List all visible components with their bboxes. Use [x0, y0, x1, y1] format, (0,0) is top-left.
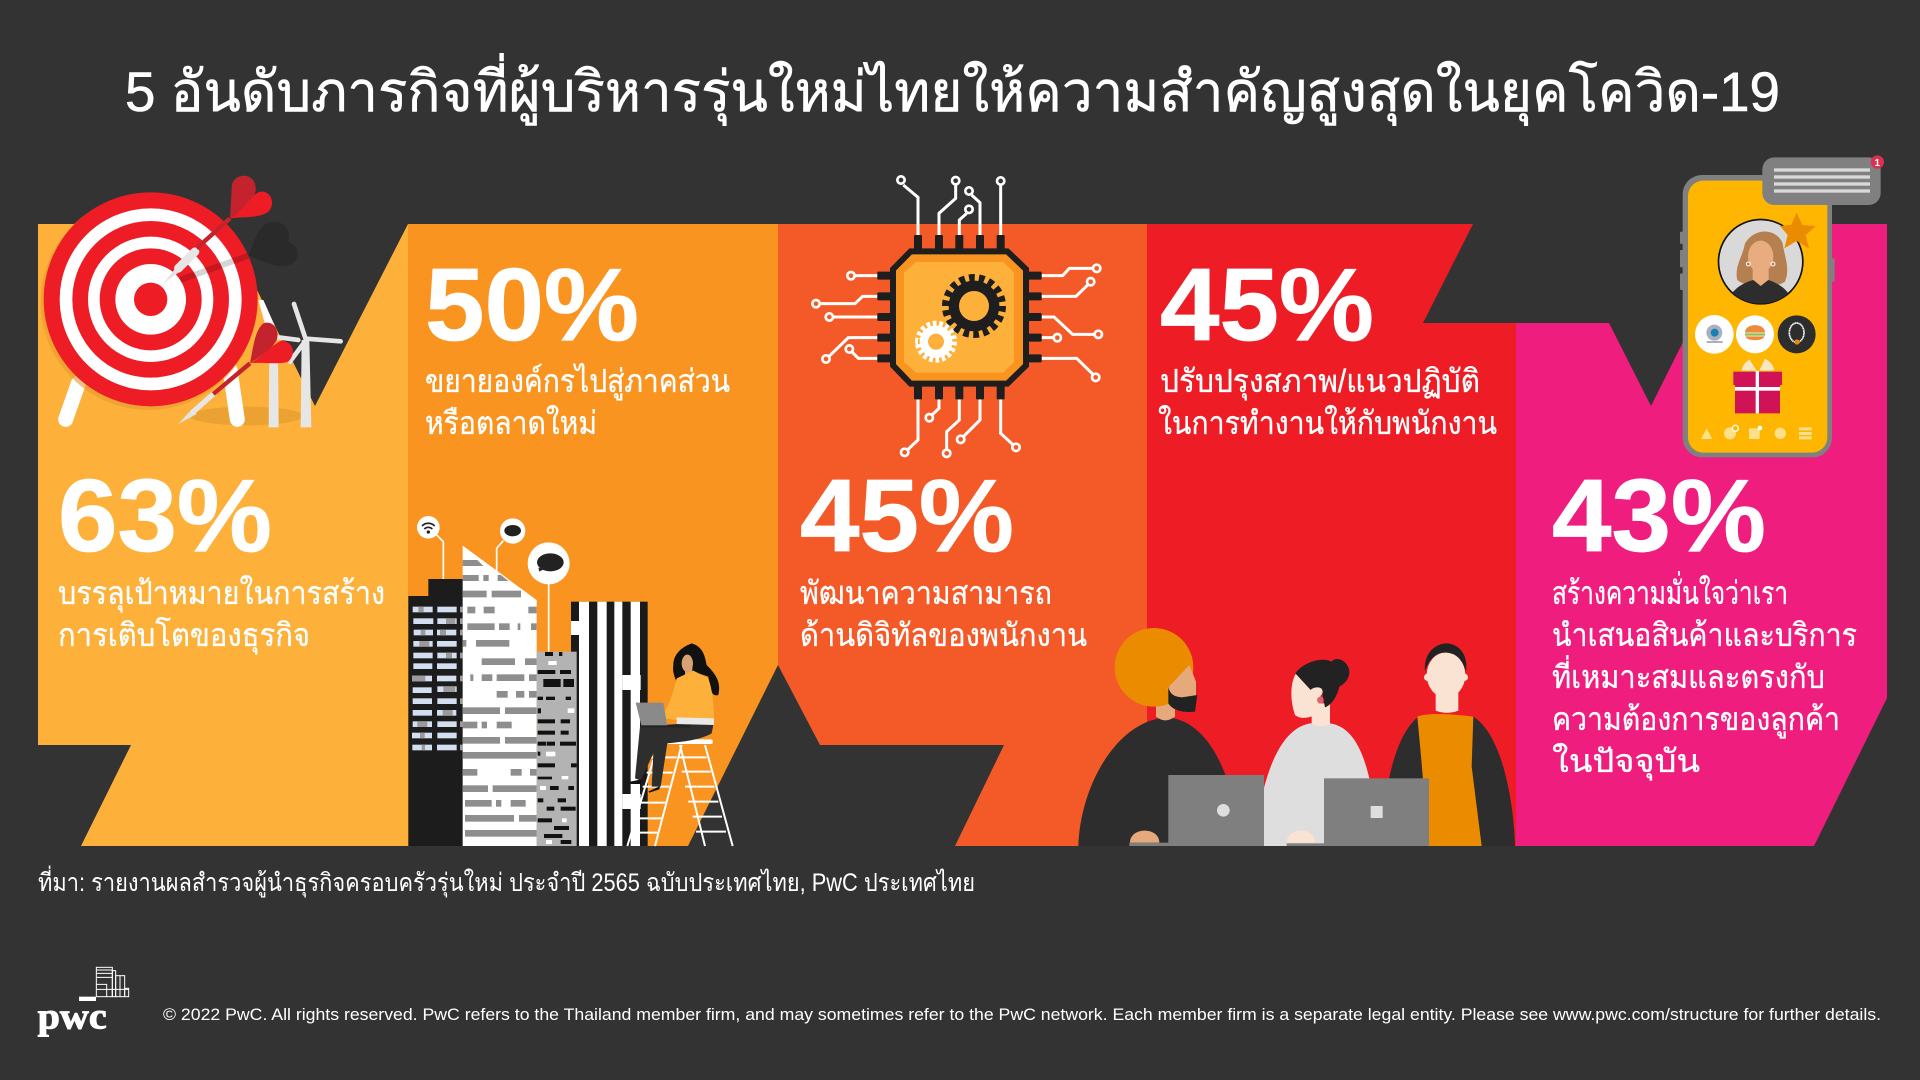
logo: PwC: pwc — [38, 996, 107, 1037]
stat: 45%: 45% — [1160, 247, 1374, 362]
text: customer-fit description: สร้างความมั่นใจว่าเรา — [1552, 571, 1788, 611]
text: expansion description: หรือตลาดใหม่ — [425, 405, 597, 441]
copyright footer: © 2022 PwC. All rights reserved. PwC refers to the Thailand member firm, and may sometimes refer to the PwC network. Each member firm is a separate legal entity. Please see www.pwc.com/structure for further details. — [163, 1005, 1881, 1024]
stat: 43%: 43% — [1552, 458, 1766, 573]
panel: 45% digital capability — [778, 176, 1147, 846]
text: customer-fit description: ในปัจจุบัน — [1552, 743, 1700, 781]
text: workplace description — [1158, 363, 1497, 441]
title: 5 อันดับภารกิจที่ผู้บริหารรุ่นใหม่ไทยให้ความสำคัญสูงสุดในยุคโควิด-19 — [125, 53, 1780, 126]
text: workplace description: ในการทำงานให้กับพนักงาน — [1158, 405, 1497, 441]
panel: 50% expand into new sectors — [408, 224, 778, 846]
stat: 50%: 50% — [425, 247, 639, 362]
logo: PwC — [38, 967, 129, 1037]
source note: ที่มา: รายงานผลสำรวจผู้นำธุรกิจครอบครัวรุ่นใหม่ ประจำปี 2565 ฉบับประเทศไทย, PwC ประเทศไทย — [38, 865, 975, 898]
text: digital capability description: พัฒนาความสามารถ — [800, 575, 1052, 611]
text: customer-fit description: ความต้องการของลูกค้า — [1552, 701, 1840, 739]
icon: three colleagues with laptops — [1078, 628, 1515, 846]
text: workplace description: ปรับปรุงสภาพ/แนวปฏิบัติ — [1160, 363, 1480, 401]
text: goal description — [58, 575, 385, 655]
icon: city buildings with woman on ladder — [408, 516, 733, 846]
panel: 43% customer-fit products — [1516, 155, 1887, 846]
stat: 63%: 63% — [58, 458, 272, 573]
text: goal description: บรรลุเป้าหมายในการสร้าง — [58, 575, 385, 613]
text: customer-fit description: ที่เหมาะสมและตรงกับ — [1552, 655, 1825, 695]
text: digital capability description — [800, 575, 1087, 653]
stat: 45%: 45% — [800, 458, 1014, 573]
panel: 63% business growth goals — [38, 176, 408, 846]
text: digital capability description: ด้านดิจิทัลของพนักงาน — [800, 617, 1087, 653]
icon: smartphone with product recommendations — [1680, 155, 1884, 457]
text: goal description: การเติบโตของธุรกิจ — [58, 617, 310, 655]
text: expansion description: ขยายองค์กรไปสู่ภาคส่วน — [425, 363, 730, 401]
panel: 45% workplace environment — [1078, 224, 1516, 846]
icon: target with darts and wind turbines — [41, 176, 341, 427]
text: customer-fit description: นำเสนอสินค้าและบริการ — [1552, 617, 1857, 653]
text: customer-fit description — [1552, 571, 1857, 781]
text: expansion description — [425, 363, 730, 441]
icon: smartphone with product recommendations: 1 — [1875, 158, 1881, 169]
icon: microchip with gears — [812, 176, 1102, 457]
